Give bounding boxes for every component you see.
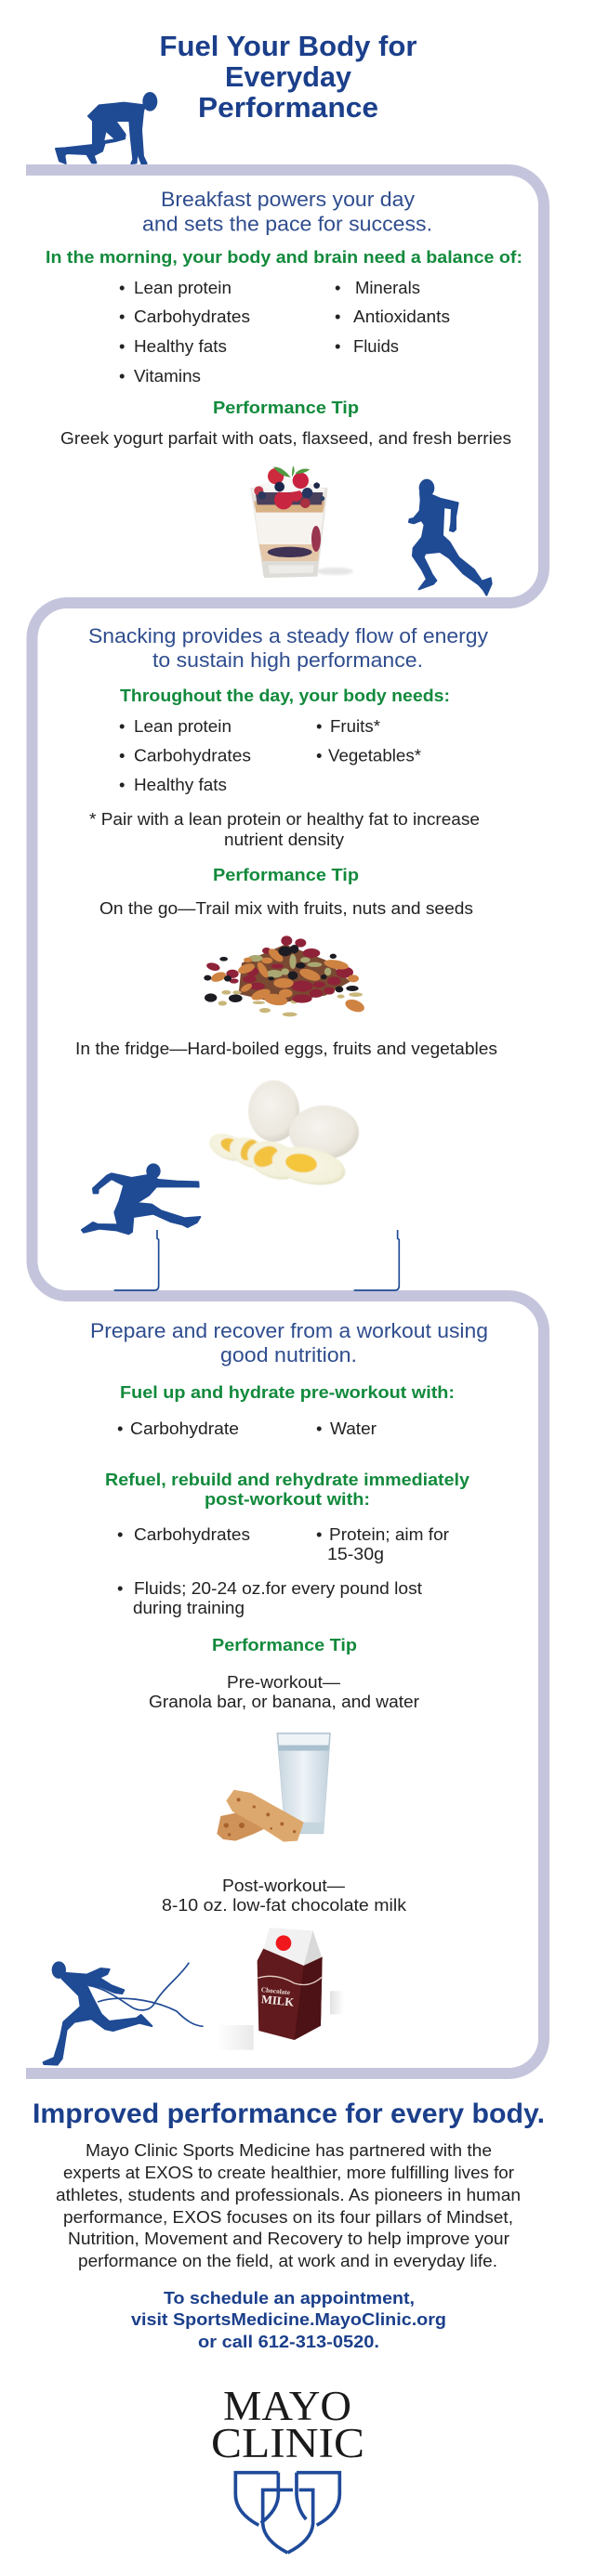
Mayo Clinic wordmark bbox=[211, 2383, 364, 2466]
logo: three shields bbox=[235, 2473, 339, 2553]
on the go tip: On the go—Trail mix with fruits, nuts and seeds bbox=[99, 898, 473, 918]
post-workout list: Carbohydrates bbox=[134, 1524, 250, 1544]
post-workout list: • bbox=[117, 1524, 123, 1544]
pre-workout subheading: Fuel up and hydrate pre-workout with: bbox=[120, 1382, 455, 1402]
call to action: or call 612-313-0520. bbox=[198, 2332, 379, 2351]
hurdle left bbox=[114, 1230, 159, 1290]
breakfast nutrient list: Carbohydrates bbox=[134, 307, 250, 326]
snacking performance tip label: Performance Tip bbox=[213, 865, 359, 884]
snacking footnote bbox=[89, 809, 480, 849]
snacking heading: to sustain high performance. bbox=[152, 648, 423, 672]
title: Everyday bbox=[225, 60, 352, 93]
snacking nutrient list: Healthy fats bbox=[134, 775, 227, 794]
snacking nutrient list: • bbox=[119, 716, 125, 736]
icon: sprinter in starting blocks bbox=[56, 92, 157, 163]
icon: water glass and granola bars bbox=[217, 1733, 330, 1842]
post-workout list: 15-30g bbox=[327, 1544, 384, 1563]
snacking footnote: * Pair with a lean protein or healthy fat to increase bbox=[89, 809, 480, 829]
icon: runner breaking finish tape bbox=[44, 1961, 204, 2065]
breakfast nutrient list: • bbox=[119, 366, 125, 386]
snacking nutrient list: • bbox=[316, 716, 322, 736]
icon: hard-boiled eggs bbox=[205, 1080, 359, 1191]
breakfast nutrient list: Healthy fats bbox=[134, 336, 227, 356]
icon: chocolate milk carton: MILK bbox=[260, 1993, 295, 2009]
panel: breakfast bbox=[46, 188, 522, 595]
title: Fuel Your Body for bbox=[160, 30, 416, 62]
pre-workout list: Carbohydrate bbox=[130, 1419, 239, 1438]
pre-workout tip bbox=[149, 1672, 419, 1711]
snacking nutrient list bbox=[119, 716, 421, 794]
post-workout subheading: post-workout with: bbox=[205, 1489, 370, 1509]
snacking nutrient list: • bbox=[119, 775, 125, 794]
closing paragraph: performance on the field, at work and in everyday life. bbox=[78, 2251, 497, 2270]
call to action: To schedule an appointment, bbox=[164, 2288, 415, 2308]
snacking nutrient list: • bbox=[119, 745, 125, 765]
closing paragraph: experts at EXOS to create healthier, more fulfilling lives for bbox=[63, 2163, 514, 2182]
post-workout list: during training bbox=[133, 1598, 245, 1617]
post-workout subheading bbox=[105, 1470, 470, 1509]
breakfast nutrient list: Lean protein bbox=[134, 278, 231, 297]
closing headline: Improved performance for every body. bbox=[33, 2099, 545, 2129]
post-workout list: Fluids; 20-24 oz.for every pound lost bbox=[134, 1578, 422, 1598]
post-workout list: Protein; aim for bbox=[329, 1524, 449, 1544]
breakfast nutrient list: Minerals bbox=[355, 278, 420, 297]
snacking nutrient list: Fruits* bbox=[330, 716, 380, 736]
snacking heading bbox=[88, 624, 488, 672]
breakfast nutrient list: Vitamins bbox=[134, 366, 201, 386]
breakfast heading: and sets the pace for success. bbox=[142, 212, 432, 236]
pre-workout tip: Granola bar, or banana, and water bbox=[149, 1692, 419, 1711]
closing paragraph: performance, EXOS focuses on its four pillars of Mindset, bbox=[63, 2207, 513, 2227]
panel: closing bbox=[33, 2099, 545, 2553]
post-workout list bbox=[117, 1524, 449, 1617]
fridge tip: In the fridge—Hard-boiled eggs, fruits and vegetables bbox=[75, 1039, 497, 1058]
breakfast nutrient list: • bbox=[119, 307, 125, 326]
post-workout list: • bbox=[117, 1578, 123, 1598]
breakfast heading: Breakfast powers your day bbox=[161, 188, 415, 211]
pre-workout list bbox=[117, 1419, 377, 1438]
title bbox=[160, 30, 416, 124]
call to action bbox=[131, 2288, 446, 2351]
breakfast nutrient list: • bbox=[335, 278, 340, 297]
snacking heading: Snacking provides a steady flow of energy bbox=[88, 624, 488, 647]
icon: chocolate milk carton: Chocolate bbox=[260, 1985, 291, 1996]
icon: hurdler bbox=[82, 1163, 399, 1290]
title: Performance bbox=[198, 91, 378, 124]
pre-workout list: • bbox=[316, 1419, 322, 1438]
breakfast nutrient list: • bbox=[119, 278, 125, 297]
workout heading: Prepare and recover from a workout using bbox=[90, 1319, 488, 1342]
snacking footnote: nutrient density bbox=[224, 830, 345, 849]
breakfast subheading: In the morning, your body and brain need a balance of: bbox=[46, 247, 522, 267]
post-workout subheading: Refuel, rebuild and rehydrate immediately bbox=[105, 1470, 470, 1489]
breakfast nutrient list: Fluids bbox=[353, 336, 399, 356]
closing paragraph: Nutrition, Movement and Recovery to help improve your bbox=[68, 2229, 509, 2248]
icon: runner bbox=[409, 479, 492, 595]
breakfast performance tip label: Performance Tip bbox=[213, 398, 359, 417]
Mayo Clinic wordmark: CLINIC bbox=[211, 2420, 364, 2466]
call to action: visit SportsMedicine.MayoClinic.org bbox=[131, 2309, 446, 2329]
snacking nutrient list: Vegetables* bbox=[328, 745, 421, 765]
icon: chocolate milk carton bbox=[217, 1928, 344, 2050]
serpentine track frame bbox=[26, 170, 544, 2073]
icon: trail mix bbox=[204, 935, 366, 1016]
breakfast nutrient list: • bbox=[335, 307, 340, 326]
breakfast heading bbox=[142, 188, 432, 236]
breakfast nutrient list: • bbox=[335, 336, 340, 356]
closing paragraph: athletes, students and professionals. As pioneers in human bbox=[56, 2185, 521, 2204]
icon: yogurt parfait bbox=[250, 465, 353, 578]
breakfast tip text: Greek yogurt parfait with oats, flaxseed, and fresh berries bbox=[60, 428, 511, 448]
workout performance tip label: Performance Tip bbox=[212, 1635, 357, 1654]
breakfast nutrient list bbox=[119, 278, 450, 386]
breakfast nutrient list: Antioxidants bbox=[353, 307, 450, 326]
closing paragraph: Mayo Clinic Sports Medicine has partnered with the bbox=[86, 2140, 492, 2160]
pre-workout list: Water bbox=[330, 1419, 377, 1438]
pre-workout tip: Pre-workout— bbox=[227, 1672, 341, 1692]
snacking nutrient list: Carbohydrates bbox=[134, 745, 251, 765]
post-workout tip: 8-10 oz. low-fat chocolate milk bbox=[162, 1895, 407, 1915]
closing paragraph bbox=[56, 2140, 521, 2270]
breakfast nutrient list: • bbox=[119, 336, 125, 356]
snacking nutrient list: Lean protein bbox=[134, 716, 231, 736]
snacking subheading: Throughout the day, your body needs: bbox=[120, 686, 450, 705]
post-workout list: • bbox=[316, 1524, 322, 1544]
snacking nutrient list: • bbox=[316, 745, 322, 765]
panel: snacking bbox=[75, 624, 497, 1290]
workout heading bbox=[90, 1319, 488, 1366]
panel: workout nutrition bbox=[44, 1319, 488, 2065]
post-workout tip bbox=[162, 1876, 407, 1915]
Mayo Clinic wordmark: MAYO bbox=[223, 2383, 351, 2429]
hurdle right bbox=[354, 1230, 399, 1290]
pre-workout list: • bbox=[117, 1419, 123, 1438]
workout heading: good nutrition. bbox=[220, 1343, 357, 1366]
post-workout tip: Post-workout— bbox=[222, 1876, 346, 1895]
